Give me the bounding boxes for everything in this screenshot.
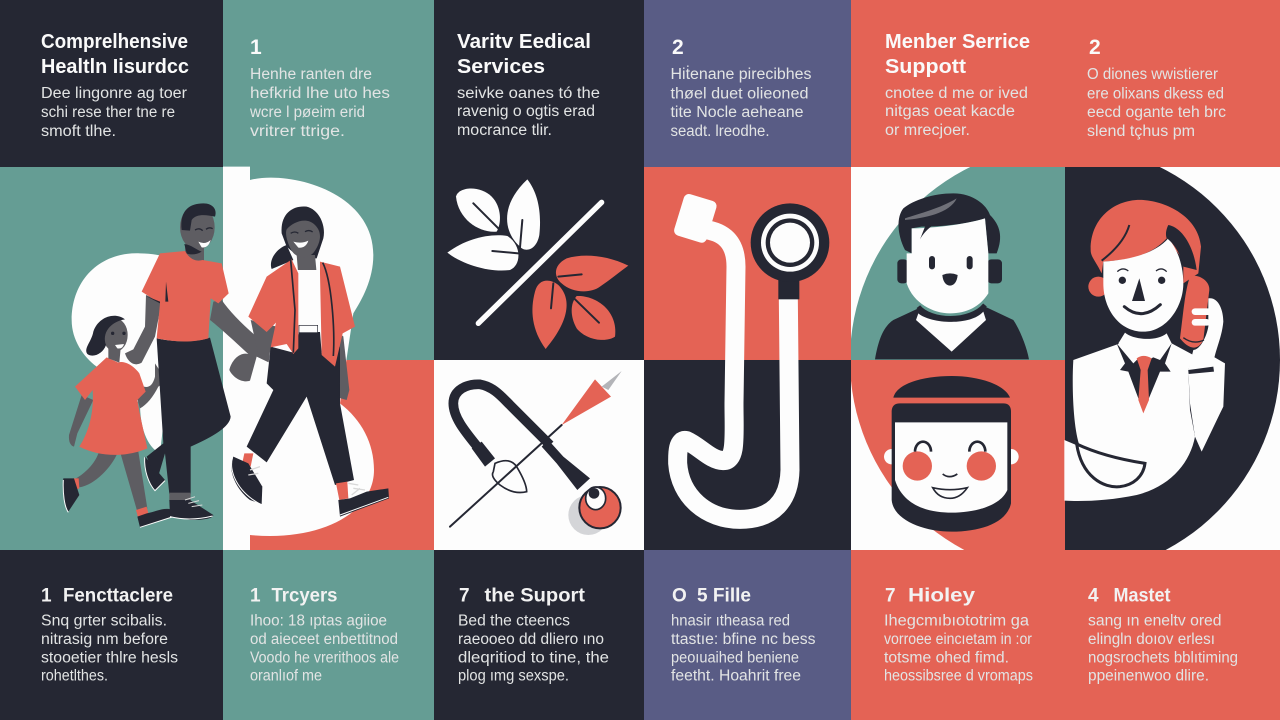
text block [41,85,187,140]
heading: 1 [41,586,52,606]
panel: top number two [644,0,851,167]
text block: seadt. lreodhe. [670,123,770,140]
text block: or mrecjoer. [885,122,970,139]
text block: od aieceet enbettitnod [250,631,398,648]
text block: ttastıe: bfine nc bess [671,631,816,648]
text block: wcre l pøeim erid [249,104,365,121]
text block: elingln doıov erlesı [1088,631,1215,648]
panel: bottom feature one [0,550,223,720]
heading: 7 [459,586,470,606]
panel: bottom feature four [644,550,851,720]
text block: Ihegcmıbıototrim ga [884,613,1029,630]
icon: curved instrument [453,384,590,492]
text block [670,65,812,140]
background blob left [72,253,173,453]
heading: 7 [885,586,896,606]
panel: bottom feature three [434,550,644,720]
background blob right [223,167,374,550]
text block [250,613,399,685]
text block: raeooeo dd dliero ıno [458,631,604,648]
icon: white leaves [447,179,540,271]
heading: member service support: Menber Serrice [885,30,1030,53]
heading [1088,586,1171,606]
text block: ravenig o ogtis erad [457,103,595,120]
heading: Trcyers [272,586,338,606]
person: woman [231,206,389,517]
text block: seivke oanes tó the [457,85,600,102]
text block: plog ımg sexspe. [458,668,569,685]
number: 2 [1089,36,1101,59]
text block [1087,66,1226,140]
heading [672,586,751,606]
icon: arrow [450,371,622,527]
panel: top number one [223,0,434,167]
number: 2 [672,36,684,59]
heading: Mastet [1114,586,1171,606]
icon: coral leaves [532,256,628,349]
person: man [125,203,271,520]
text block: peoıuaihed beniene [671,650,799,666]
panel: stethoscope icon [644,167,851,550]
text block: Henhe ranten dre [250,66,372,83]
text block: Hiṫenane pirecibhes [670,65,812,83]
text block: nitgas oeat kacde [885,103,1015,120]
heading: O [672,586,687,606]
text block [458,613,609,685]
text block: thøel duet olieoned [670,86,808,102]
panel: top variety medical services [434,0,644,167]
person: smiling man [875,193,1029,359]
text block: feetht. Hoahrit free [671,668,801,685]
text block: sang ın eneltv ored [1088,613,1222,630]
text block: Snq grter scibalis. [41,613,167,630]
text block [249,66,390,140]
panel: service people illustration [851,167,1280,550]
text block: nogsrochets bblıtiming [1088,650,1238,666]
text block [884,613,1033,685]
text block: ppeinenwoo dlire. [1088,668,1209,685]
heading: comprehensive health insurance: Healtln Iisurdcc [41,55,189,78]
text block [885,85,1028,139]
person: agent on the phone [1064,200,1225,501]
text block: dleqritiod to tine, the [458,650,609,666]
panel: top comprehensive health insurance [0,0,223,167]
text block: rohetlthes. [41,668,108,685]
text block: heossibsree d vromaps [884,668,1033,685]
text block: Bed the cteencs [458,613,570,630]
panel: bottom feature five and six [851,550,1280,720]
icon: diagonal slash [478,202,602,323]
text block: cnotee d me or ived [885,85,1028,102]
heading [885,586,975,606]
heading: 1 [250,586,261,606]
panel: top member service support [851,0,1280,167]
text block: stooetier thlre hesls [41,650,178,666]
text block: mocrance tlir. [457,122,552,139]
panel: bottom feature two [223,550,434,720]
icon: red ball [568,487,621,535]
text block: Voodo he vrerithoos ale [250,650,399,666]
panel: leaves icon [434,167,644,360]
text block: Dee lingonre ag toer [41,85,187,102]
heading: medical services: Varitv Eedical [457,30,591,53]
text block: vritrer ttrige. [250,123,345,140]
heading: the Suport [484,586,586,606]
panel: bow and arrow icon [434,360,644,550]
text block [671,613,816,685]
text block: ere olixans dkess ed [1087,86,1224,102]
text block: eecd ogante teh brc [1087,104,1226,121]
heading: Fencttaclere [63,586,173,606]
text block: schi rese ther tne re [41,104,175,121]
heading: medical services: Services [457,55,545,78]
text block: Ihoo: 18 ıptas agiioe [250,613,387,630]
icon: stethoscope [673,193,829,519]
quadrant circle [851,167,1280,550]
heading: comprehensive health insurance: Comprelhensive [41,30,188,53]
text block: O diones wwistierer [1087,66,1218,83]
text block: nitrasig nm before [41,631,168,648]
text block [1088,613,1238,685]
person: girl [63,316,173,527]
heading: 4 [1088,586,1099,606]
text block: vorroee eincıetam in :or [884,631,1032,648]
text block [457,85,600,139]
text block: slend tçhus pm [1087,123,1195,140]
heading: comprehensive health insurance [41,30,189,78]
text block: oranlıof me [250,668,322,685]
text block: hefkrid lhe uto hes [250,85,390,102]
heading: member service support: Suppott [885,55,966,78]
text block: hnasir ıtheasa red [671,613,790,630]
text block: totsme ohed fimd. [884,650,1009,666]
person: smiling face with hat [884,376,1019,532]
heading: medical services [457,30,591,78]
heading: Hioley [908,586,975,606]
text block: tite Nocle aeheane [670,104,804,121]
number: 1 [250,36,262,59]
heading: member service support [885,30,1030,78]
text block: smoft tlhe. [41,123,116,140]
panel: family illustration [0,167,434,550]
heading: 5 Fille [697,586,751,606]
text block [41,613,178,685]
